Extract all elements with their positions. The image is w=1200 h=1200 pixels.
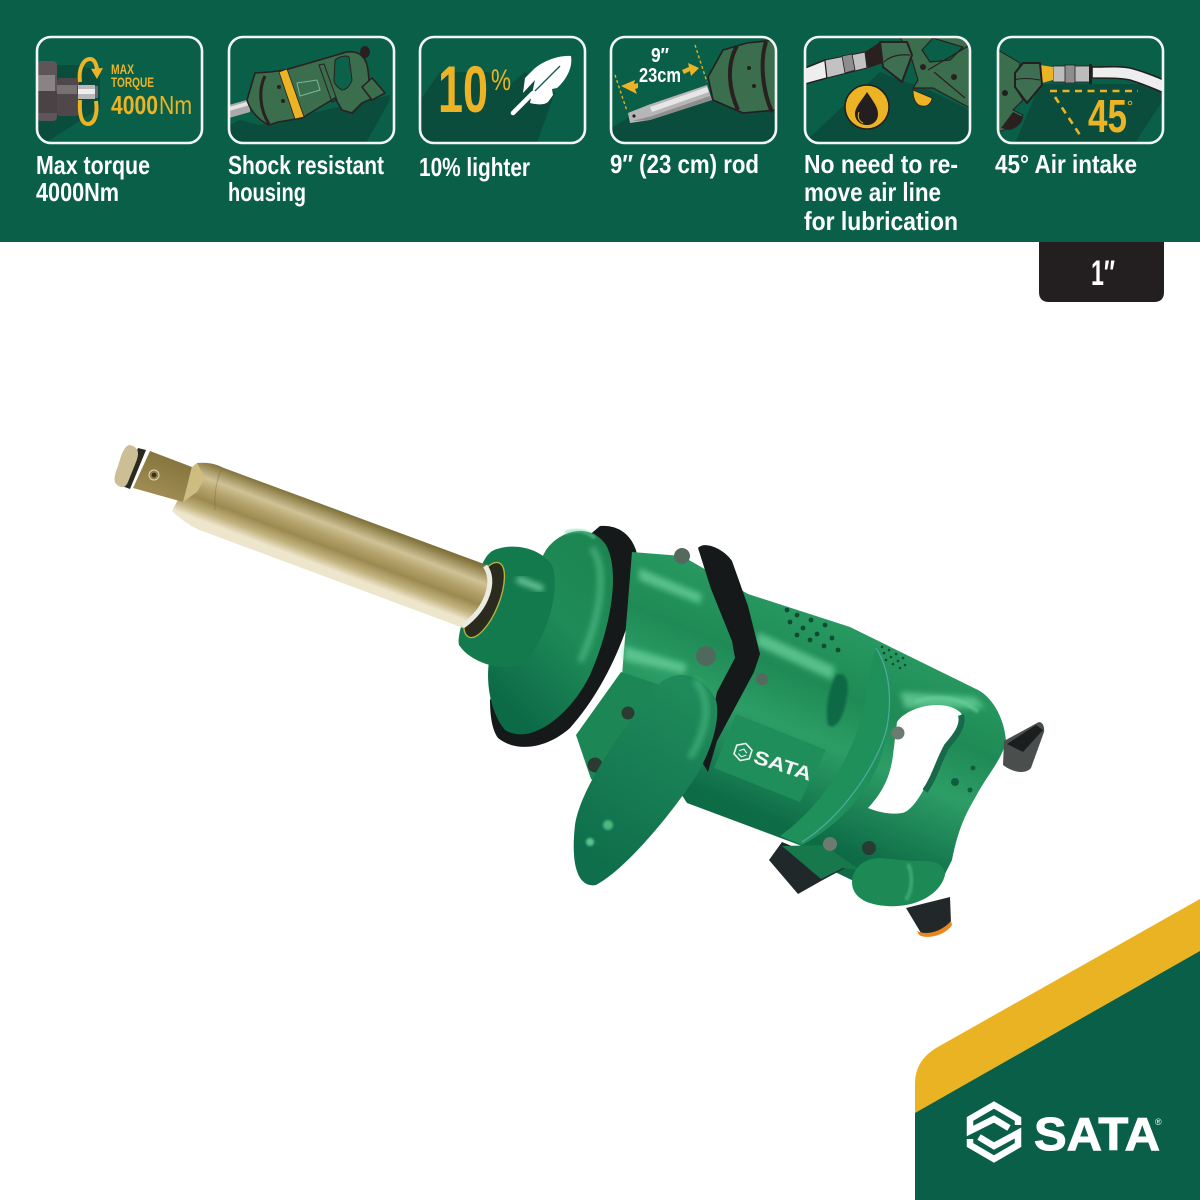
icon panel: 9 inch rod: 23cm — [639, 65, 681, 87]
D-handle opening — [868, 705, 962, 814]
label: max torque: 4000Nm — [36, 177, 119, 207]
size tab: 1″ — [1091, 254, 1115, 293]
torque text: TORQUE — [111, 75, 154, 90]
torque text — [111, 62, 192, 120]
label: rod length: 9″ (23 cm) rod — [610, 149, 759, 179]
handle inner shade — [925, 715, 962, 791]
dimension marks — [615, 45, 707, 111]
icon panel: 10% lighter: 10 — [438, 52, 488, 126]
vent holes — [785, 608, 906, 669]
icon: feather — [513, 56, 571, 113]
icon: SATA hex logo — [970, 1105, 1018, 1159]
nose hub — [455, 547, 555, 667]
torque text: MAX — [111, 62, 134, 77]
body recess — [827, 674, 848, 726]
icon panel: 9 inch rod: 9″ — [651, 45, 669, 67]
name plate: SATA — [751, 747, 815, 786]
icon: rotation arrows — [80, 59, 103, 124]
icon panel: shock resistant housing — [229, 37, 394, 143]
torque text: Nm — [159, 90, 192, 120]
nose bell — [488, 531, 613, 734]
air inlet — [852, 858, 945, 906]
label: air intake: 45° Air intake — [995, 149, 1137, 179]
body highlights — [624, 568, 985, 708]
size tab — [1039, 242, 1164, 302]
label: 10% lighter: 10% lighter — [419, 152, 530, 182]
label: lubrication: No need to re- — [804, 149, 958, 179]
registered mark: ® — [1155, 1117, 1162, 1127]
icon: oil drop — [845, 85, 889, 129]
name plate — [714, 714, 826, 802]
icon panel: 10% lighter: % — [491, 64, 511, 97]
icon panel: 9 inch rod — [611, 37, 776, 143]
label: lubrication — [804, 149, 958, 236]
black ring behind bell — [490, 526, 639, 747]
icon panel: 10% lighter — [420, 37, 585, 143]
icon panel: 45 degree air intake: 45 — [1088, 90, 1127, 142]
arrows — [621, 63, 699, 94]
corner brand block — [915, 899, 1200, 1200]
header band — [0, 0, 1200, 242]
bracket plate with screws — [576, 672, 660, 790]
icon panel: 45 degree air intake — [998, 37, 1164, 143]
label: max torque — [36, 150, 150, 207]
label: shock resistant housing: housing — [228, 177, 306, 207]
torque text: 4000 — [111, 90, 158, 120]
rear housing — [780, 645, 889, 845]
label: lubrication: move air line — [804, 177, 941, 207]
tool body and D-handle silhouette — [620, 552, 1006, 884]
front handle — [574, 675, 717, 885]
knob green mount — [782, 845, 860, 879]
label: shock resistant housing — [228, 150, 384, 207]
trigger lever — [1003, 722, 1044, 772]
SATA wordmark: SATA — [1034, 1108, 1160, 1160]
extension rod — [115, 445, 491, 628]
angle dashes — [1050, 91, 1138, 138]
icon panel: max torque — [37, 37, 202, 143]
icon panel: lubrication — [805, 37, 970, 143]
label: shock resistant housing: Shock resistant — [228, 150, 384, 180]
handle details — [862, 766, 976, 855]
label: max torque: Max torque — [36, 150, 150, 180]
label: lubrication: for lubrication — [804, 206, 958, 236]
black knob — [769, 842, 845, 894]
impact wrench product illustration — [115, 445, 1044, 937]
second black ring — [698, 545, 760, 772]
bolts — [674, 548, 904, 851]
